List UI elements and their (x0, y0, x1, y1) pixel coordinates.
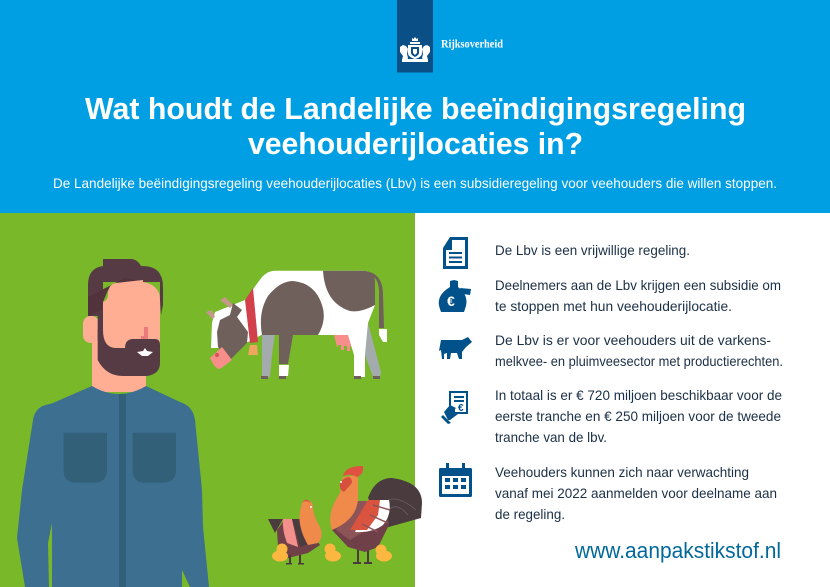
item: registration (439, 463, 777, 522)
item: budget: eerste tranche en € 250 miljoen voor de tweede (495, 408, 781, 424)
text: De Lbv is een vrijwillige regeling. (495, 242, 690, 258)
nose (141, 327, 148, 339)
item: registration: de regeling. (495, 506, 565, 522)
wordmark: Rijksoverheid (441, 38, 504, 50)
far legs (262, 333, 275, 377)
icon: coat of arms (400, 37, 430, 62)
rooster tail (368, 478, 422, 528)
hen tail and body (268, 519, 283, 533)
item: budget: tranche van de lbv. (495, 429, 607, 445)
item: voluntary (443, 237, 690, 269)
rooster chest (330, 475, 358, 530)
item: budget (441, 387, 782, 445)
title: Wat houdt de Landelijke beeïndigingsregeling (85, 91, 746, 126)
head (217, 303, 248, 360)
rooster legs (357, 548, 359, 563)
item: subsidy: te stoppen met hun veehouderijlocatie. (495, 298, 732, 314)
text: Veehouders kunnen zich naar verwachting (495, 464, 749, 480)
item: subsidy (439, 277, 781, 314)
neck white (211, 300, 265, 348)
back spot (323, 271, 375, 311)
face (103, 280, 160, 345)
udder (334, 335, 354, 351)
illustration: cow (206, 271, 387, 379)
rooster comb (343, 466, 363, 477)
text: De Lbv is er voor veehouders uit de varkens- (495, 332, 771, 348)
rooster wing (355, 500, 390, 532)
illustration: poultry (268, 466, 422, 564)
panel: blue header (0, 0, 830, 213)
panel: information list (439, 237, 783, 563)
text: In totaal is er € 720 miljoen beschikbaar voor de (495, 387, 782, 403)
icon: hand with document: € (458, 403, 464, 414)
muzzle (210, 347, 232, 369)
shirt placket and pockets (64, 394, 176, 587)
item: sectors: melkvee- en pluimveesector met productierechten. (495, 353, 783, 369)
logo: Rijksoverheid (397, 0, 504, 72)
hair (88, 259, 163, 340)
title (85, 91, 746, 161)
hen legs (289, 555, 291, 564)
icon: document (443, 237, 468, 269)
rooster body (332, 501, 389, 552)
shirt (17, 386, 209, 587)
tail (365, 271, 384, 328)
panel: green illustration (0, 213, 422, 587)
icon: cow (439, 337, 472, 359)
icon: money bag (439, 280, 471, 312)
website link: www.aanpakstikstof.nl (574, 538, 781, 563)
chicks (272, 544, 392, 562)
horns (206, 297, 233, 319)
illustration: farmer (17, 259, 209, 587)
icon: hand with document (441, 391, 468, 424)
subtitle: De Landelijke beëindigingsregeling veehouderijlocaties (Lbv) is een subsidieregeling voor veehouders die willen stoppen. (53, 175, 777, 191)
hen chest and head (300, 500, 322, 545)
beard (98, 330, 160, 376)
collar and bell (245, 288, 258, 343)
body (245, 271, 375, 377)
item: registration: vanaf mei 2022 aanmelden voor deelname aan (495, 485, 777, 501)
icon: calendar (439, 463, 472, 497)
title: veehouderijlocaties in? (248, 126, 583, 161)
item: sectors (439, 332, 783, 369)
ear (83, 316, 99, 343)
belly spot and front leg (261, 281, 324, 364)
text: Deelnemers aan de Lbv krijgen een subsidie om (495, 277, 781, 293)
teeth (137, 348, 153, 356)
icon: money bag: € (447, 293, 455, 309)
neck (92, 340, 146, 392)
